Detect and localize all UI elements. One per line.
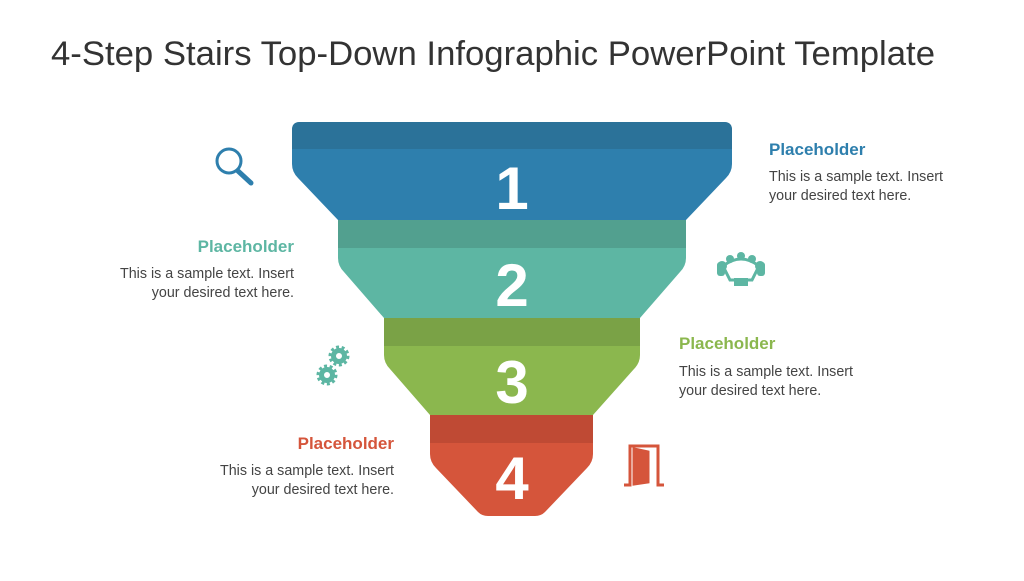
text block 3 — [679, 334, 853, 399]
icon: magnifier — [217, 149, 251, 183]
text block 2 — [120, 237, 294, 301]
text block 3: Placeholder — [679, 334, 776, 353]
icon: gears — [318, 347, 348, 384]
text block 3: This is a sample text. Insert — [679, 364, 853, 380]
icon: door — [624, 446, 664, 485]
step 4: 4 — [495, 445, 529, 512]
text block 1 — [769, 140, 943, 204]
text block 4 — [220, 434, 394, 498]
text block 4: your desired text here. — [252, 482, 394, 498]
text block 1: This is a sample text. Insert — [769, 169, 943, 185]
step 2 — [338, 220, 686, 319]
text block 3: your desired text here. — [679, 383, 821, 399]
step 1 — [292, 122, 732, 222]
text block 2: your desired text here. — [152, 285, 294, 301]
step 3: 3 — [495, 349, 529, 416]
step 2: 2 — [495, 252, 529, 319]
text block 1: Placeholder — [769, 140, 866, 159]
step 4 — [430, 415, 593, 516]
text block 1: your desired text here. — [769, 188, 911, 204]
icon: meeting table — [717, 252, 765, 286]
text block 4: Placeholder — [298, 434, 394, 453]
step 3 — [384, 318, 640, 416]
text block 2: This is a sample text. Insert — [120, 266, 294, 282]
step 1: 1 — [495, 155, 529, 222]
funnel — [292, 122, 732, 516]
text block 4: This is a sample text. Insert — [220, 463, 394, 479]
title: 4-Step Stairs Top-Down Infographic PowerPoint Template — [51, 35, 935, 73]
text block 2: Placeholder — [198, 237, 294, 256]
